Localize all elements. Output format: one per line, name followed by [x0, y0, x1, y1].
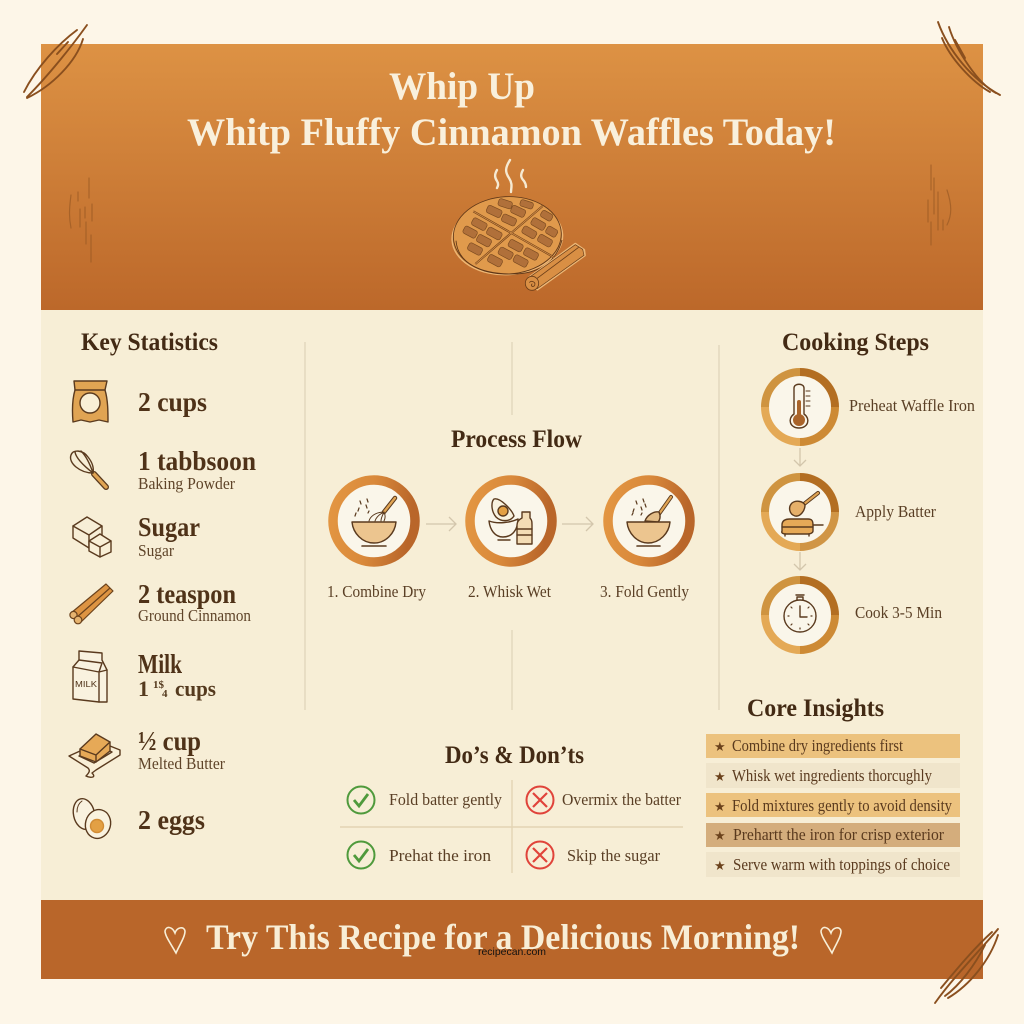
do: preheat the iron	[348, 842, 491, 868]
step: cook 3-5 min	[765, 580, 942, 650]
stat: 2 eggs: 2 eggs	[138, 805, 205, 835]
decorative scribble: right side	[928, 165, 951, 245]
stat: melted butter: ½ cup	[138, 726, 201, 756]
label: combine dry: 1. Combine Dry	[327, 582, 426, 601]
stat: milk: 1$	[153, 679, 164, 691]
arrow	[562, 517, 593, 531]
stat: milk: cups	[175, 676, 216, 701]
label: whisk wet: 2. Whisk Wet	[468, 582, 551, 601]
insight 5: ★	[714, 858, 726, 873]
icon: whisk	[71, 451, 106, 487]
call to action: Try This Recipe for a Delicious Morning!	[206, 917, 800, 957]
icon: cinnamon sticks	[70, 584, 113, 624]
do: preheat the iron: Prehat the iron	[389, 846, 491, 865]
insight 4: ★	[714, 828, 726, 843]
insight 4: Prehartt the iron for crisp exterior	[733, 825, 944, 844]
insight 5: Serve warm with toppings of choice	[733, 855, 950, 874]
icon: butter on a dish	[69, 734, 120, 777]
insight 2	[706, 763, 960, 788]
panel: main body	[41, 310, 983, 900]
watermark: recipecan.com	[478, 946, 546, 958]
stat: sugar	[138, 512, 200, 560]
insight 1: ★	[714, 739, 726, 754]
title: Whitp Fluffy Cinnamon Waffles Today!	[187, 111, 836, 154]
icon: heart left	[165, 927, 185, 953]
icon: sugar cubes	[73, 517, 111, 557]
heading: cooking steps: Cooking Steps	[782, 329, 929, 356]
stat: melted butter: Melted Butter	[138, 754, 225, 773]
label: cook 3-5 min: Cook 3-5 Min	[855, 603, 942, 622]
heading: core insights: Core Insights	[747, 695, 884, 722]
stat: ground cinnamon: 2 teaspon	[138, 579, 236, 609]
icon: flour bag	[72, 381, 108, 422]
decorative scribble: top left	[24, 25, 87, 98]
insight 3: ★	[714, 799, 726, 814]
decorative scribble: bottom right	[935, 929, 998, 1003]
stat: sugar: Sugar	[138, 512, 200, 542]
icon: egg and bottle	[489, 499, 532, 544]
icon: bowl and whisk	[352, 498, 396, 546]
label: preheat waffle iron: Preheat Waffle Iron	[849, 396, 975, 415]
step: preheat waffle iron	[765, 372, 975, 442]
stat: sugar: Sugar	[138, 541, 174, 560]
don't: skip the sugar	[526, 842, 660, 868]
icon: milk carton: MILK	[75, 679, 97, 689]
arrow	[794, 448, 806, 466]
insight 3: Fold mixtures gently to avoid density	[732, 796, 952, 815]
decorative scribble: top right	[938, 22, 1000, 95]
decorative scribble: left side	[70, 178, 92, 262]
panel: cooking steps	[765, 329, 975, 650]
stat: milk: 4	[162, 688, 168, 700]
icon: steam	[495, 160, 526, 192]
icon: thermometer	[790, 384, 810, 428]
stat: milk: Milk	[138, 649, 182, 679]
label: apply batter: Apply Batter	[855, 502, 936, 521]
icon: stopwatch	[784, 595, 816, 632]
panel: key statistics	[69, 329, 256, 841]
label: fold gently: 3. Fold Gently	[600, 582, 689, 601]
icon: bowl and spatula	[627, 497, 671, 546]
panel: core insights	[706, 695, 960, 877]
step 3: fold gently	[600, 480, 690, 601]
title: Whip Up	[389, 65, 535, 108]
stat: baking powder	[138, 446, 256, 493]
insight 1: Combine dry ingredients first	[732, 736, 903, 755]
panel: process flow	[327, 426, 690, 601]
footer banner	[41, 900, 983, 979]
do: fold batter gently	[348, 786, 502, 814]
insight 1	[706, 734, 960, 758]
arrow	[426, 517, 456, 531]
stat: melted butter	[138, 726, 225, 773]
don't: overmix the batter	[526, 786, 681, 814]
header banner	[41, 44, 983, 310]
stat: 2 cups: 2 cups	[138, 387, 207, 417]
icon: waffle with cinnamon stick	[450, 194, 585, 290]
icon: milk carton	[73, 651, 107, 702]
title	[187, 65, 836, 154]
step 2: whisk wet	[468, 480, 552, 601]
stat: milk	[138, 649, 216, 701]
arrow	[794, 552, 806, 570]
step: apply batter	[765, 477, 936, 547]
heading: key statistics: Key Statistics	[81, 329, 218, 356]
insight 2: ★	[714, 769, 726, 784]
stat: ground cinnamon	[138, 579, 251, 625]
insight 3	[706, 793, 960, 817]
icon: ladle and waffle iron	[782, 493, 823, 536]
stat: milk: 1	[138, 676, 149, 701]
step 1: combine dry	[327, 480, 426, 601]
icon: eggs	[71, 797, 114, 841]
dividers	[305, 342, 719, 710]
stat: baking powder: Baking Powder	[138, 474, 235, 493]
insight 2: Whisk wet ingredients thorcughly	[732, 766, 932, 785]
insight 5	[706, 852, 960, 877]
icon: cinnamon stick	[525, 244, 585, 290]
don't: skip the sugar: Skip the sugar	[567, 846, 660, 865]
panel: do's and don'ts	[340, 742, 683, 873]
stat: baking powder: 1 tabbsoon	[138, 446, 256, 476]
heading: do's and don'ts: Do’s & Don’ts	[445, 742, 584, 769]
don't: overmix the batter: Overmix the batter	[562, 790, 681, 809]
stat: ground cinnamon: Ground Cinnamon	[138, 606, 251, 625]
do: fold batter gently: Fold batter gently	[389, 790, 502, 809]
icon: heart right	[821, 927, 841, 953]
heading: process flow: Process Flow	[451, 426, 582, 453]
